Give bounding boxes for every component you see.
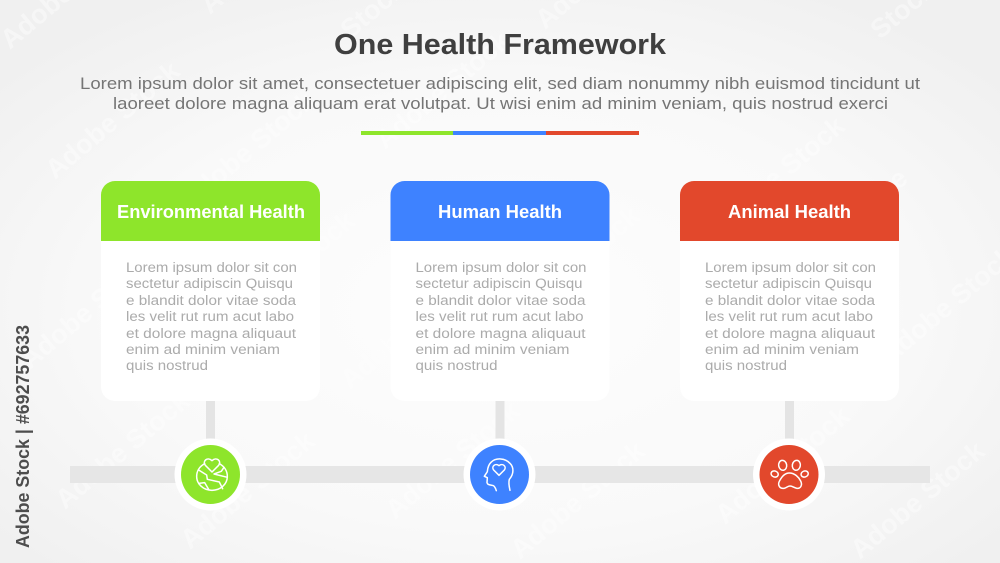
tricolor title underline <box>361 131 639 135</box>
animal health text <box>705 260 876 373</box>
intro paragraph <box>80 74 920 113</box>
environmental health text <box>126 260 297 373</box>
text: Adobe Stock <box>215 205 361 335</box>
icon: head with heart <box>464 438 536 510</box>
environmental health text: et dolore magna aliquaut <box>126 326 296 341</box>
text: Adobe <box>830 163 913 240</box>
text: Adobe Stock <box>505 435 651 563</box>
environmental health text: quis nostrud <box>126 358 208 373</box>
animal health text: et dolore magna aliquaut <box>705 326 875 341</box>
title: One Health Framework <box>334 29 667 61</box>
human health text: quis nostrud <box>416 358 498 373</box>
environmental health heading: Environmental Health <box>117 201 305 222</box>
animal health text: enim ad minim veniam <box>705 342 859 357</box>
text: Adobe Stock <box>710 400 856 530</box>
animal health text: les velit rut rum acut labo <box>705 309 873 324</box>
text: Adobe Stock <box>845 435 991 563</box>
human health text <box>416 260 586 373</box>
animal health heading: Animal Health <box>728 201 851 222</box>
text: Adobe Stock <box>40 55 186 185</box>
environmental health header <box>101 181 320 241</box>
text: Adobe Stock <box>175 425 321 555</box>
human health text: e blandit dolor vitae soda <box>416 293 586 308</box>
animal health text: quis nostrud <box>705 358 787 373</box>
human health text: Lorem ipsum dolor sit con <box>416 260 586 275</box>
animal health header <box>680 181 899 241</box>
environmental health text: les velit rut rum acut labo <box>126 309 294 324</box>
panel: animal health <box>680 181 899 440</box>
text: Adobe Stock <box>175 85 321 215</box>
human health text: sectetur adipiscin Quisqu <box>416 276 582 291</box>
text: Adobe Stock <box>335 265 481 395</box>
human health header <box>390 181 610 241</box>
stock id side label: Adobe Stock | #692757633 <box>13 325 33 548</box>
icon: earth with heart <box>174 438 246 510</box>
text: Adobe Stock <box>380 395 526 525</box>
human health text: les velit rut rum acut labo <box>416 309 584 324</box>
text: Adobe Stock <box>705 110 851 240</box>
text: Adobe Stock <box>15 245 161 375</box>
human health text: et dolore magna aliquaut <box>416 326 586 341</box>
environmental health text: sectetur adipiscin Quisqu <box>126 276 293 291</box>
animal health text: sectetur adipiscin Quisqu <box>705 276 872 291</box>
environmental health text: enim ad minim veniam <box>126 342 280 357</box>
icon: paw print <box>753 438 825 510</box>
text: Adobe Stock <box>370 25 516 155</box>
environmental health text: e blandit dolor vitae soda <box>126 293 297 308</box>
animal health text: e blandit dolor vitae soda <box>705 293 876 308</box>
intro paragraph: laoreet dolore magna aliquam erat volutpat. Ut wisi enim ad minim veniam, quis nostrud exerci <box>113 94 888 113</box>
panel: environmental health <box>101 181 320 440</box>
animal health text: Lorem ipsum dolor sit con <box>705 260 876 275</box>
panel: human health <box>390 181 610 440</box>
text: Adobe Stock <box>500 200 646 330</box>
human health heading: Human Health <box>438 201 562 222</box>
environmental health text: Lorem ipsum dolor sit con <box>126 260 297 275</box>
human health text: enim ad minim veniam <box>416 342 570 357</box>
text: Adobe Stock <box>50 385 196 515</box>
timeline bar <box>70 466 930 483</box>
text: Adobe Stock <box>670 265 816 395</box>
intro paragraph: Lorem ipsum dolor sit amet, consectetuer adipiscing elit, sed diam nonummy nibh euismod tincidunt ut <box>80 74 920 93</box>
